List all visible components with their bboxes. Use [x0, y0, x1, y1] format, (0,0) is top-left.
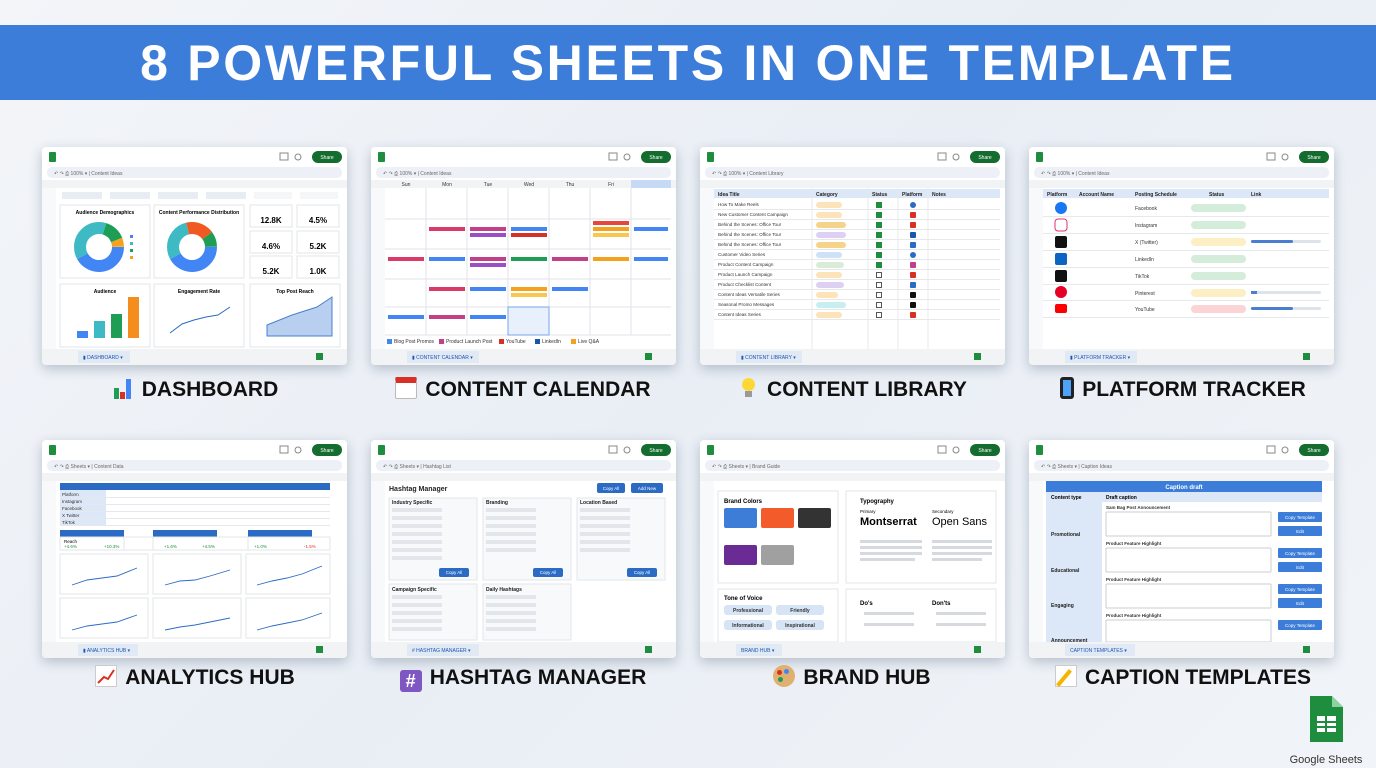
panel: content calendar: Product Launch Post: [446, 339, 493, 345]
title: 8 POWERFUL SHEETS IN ONE TEMPLATE: [140, 35, 1236, 91]
panel: caption templates: Product Feature Highlight: [1106, 577, 1162, 582]
panel: content calendar: ↶ ↷ ⎙ 100% ▾ | Content Ideas: [383, 171, 452, 177]
panel: content library: Platform: [902, 192, 923, 198]
panel: content library: Category: [816, 192, 838, 198]
panel: platform tracker: ↶ ↷ ⎙ 100% ▾ | Content Ideas: [1041, 171, 1110, 177]
panel: hashtag manager: Daily Hashtags: [486, 587, 522, 593]
panel: analytics hub: +4.6%: [64, 544, 77, 549]
panel: platform tracker: Status: [1209, 192, 1224, 198]
panel: content library: Product Launch Campaign: [718, 272, 773, 277]
panel: hashtag manager: Copy All: [446, 570, 462, 575]
label: content calendar: CONTENT CALENDAR: [425, 378, 651, 401]
panel: content library: ↶ ↷ ⎙ 100% ▾ | Content Library: [712, 171, 784, 177]
panel: analytics hub: Facebook: [62, 506, 83, 511]
panel: brand hub: Typography: [860, 499, 895, 505]
panel: brand hub: Do's: [860, 601, 873, 607]
panel: caption templates: Copy Template: [1285, 587, 1315, 592]
panel: platform tracker: Link: [1251, 192, 1261, 198]
panel: content calendar: LinkedIn: [542, 339, 561, 345]
panel: content calendar: [371, 147, 676, 365]
panel: caption templates: Edit: [1296, 529, 1305, 534]
panel: content library: Behind the Scenes: Office Tour: [718, 242, 782, 247]
panel: brand hub: Montserrat: [860, 516, 917, 528]
panel: analytics hub: +1.0%: [254, 544, 267, 549]
panel: brand hub: BRAND HUB ▾: [741, 648, 775, 654]
label: hashtag manager: #: [406, 671, 416, 691]
panel: dashboard: 12.8K: [260, 216, 282, 225]
panel: caption templates: ↶ ↷ ⎙ Sheets ▾ | Caption Ideas: [1041, 464, 1112, 470]
panel: content library: ▮ CONTENT LIBRARY ▾: [741, 355, 796, 361]
panel: caption templates: Content type: [1051, 495, 1082, 501]
label: brand hub: BRAND HUB: [803, 666, 931, 689]
panel: brand hub: Don'ts: [932, 601, 951, 607]
panel: caption templates: CAPTION TEMPLATES ▾: [1070, 648, 1127, 654]
panel: hashtag manager: Hashtag Manager: [389, 486, 448, 493]
panel: analytics hub: -1.5%: [304, 544, 316, 549]
panel: platform tracker: Instagram: [1135, 223, 1157, 229]
panel: caption templates: Draft caption: [1106, 495, 1137, 501]
panel: content calendar: Sun: [402, 182, 411, 188]
panel: caption templates: Copy Template: [1285, 515, 1315, 520]
panel: dashboard: ↶ ↷ ⎙ 100% ▾ | Content Ideas: [54, 171, 123, 177]
panel: dashboard: Share: [320, 155, 334, 161]
panel: hashtag manager: Copy All: [634, 570, 650, 575]
logo: google sheets: [1290, 696, 1362, 766]
panel: content library: Product Content Campaign: [718, 262, 774, 267]
panel: dashboard: ▮ DASHBOARD ▾: [83, 355, 123, 361]
panel: analytics hub: ↶ ↷ ⎙ Sheets ▾ | Content Data: [54, 464, 124, 470]
panel: brand hub: Tone of Voice: [724, 596, 763, 602]
panel: hashtag manager: Industry Specific: [392, 500, 433, 506]
panel: analytics hub: [42, 440, 347, 658]
panel: dashboard: 5.2K: [310, 242, 327, 251]
panel: hashtag manager: # HASHTAG MANAGER ▾: [412, 648, 471, 654]
panel: dashboard: Audience Demographics: [76, 210, 135, 216]
panel: content library: New Customer Content Campaign: [718, 212, 788, 217]
panel: platform tracker: Facebook: [1135, 206, 1157, 212]
logo: google sheets: Google Sheets: [1290, 754, 1362, 766]
label: content library: CONTENT LIBRARY: [767, 378, 967, 401]
panel: platform tracker: LinkedIn: [1135, 257, 1154, 263]
panel: dashboard: [42, 147, 347, 365]
panel: hashtag manager: Location Based: [580, 500, 617, 506]
label: dashboard: DASHBOARD: [142, 378, 278, 401]
panel: caption templates: Edit: [1296, 601, 1305, 606]
panel: dashboard: Top Post Reach: [276, 289, 314, 295]
panel: platform tracker: Platform: [1047, 192, 1068, 198]
panel: dashboard: Engagement Rate: [178, 289, 220, 295]
panel: dashboard: 1.0K: [310, 267, 327, 276]
panel: content calendar: Blog Post Promos: [394, 339, 435, 345]
panel: content library: Status: [872, 192, 888, 198]
panel: platform tracker: TikTok: [1135, 274, 1150, 280]
panel: platform tracker: Account Name: [1079, 192, 1114, 198]
panel: content calendar: Share: [649, 155, 663, 161]
panel: platform tracker: Posting Schedule: [1135, 192, 1177, 198]
panel: content library: [700, 147, 1005, 365]
panel: caption templates: Engaging: [1051, 603, 1074, 609]
label: caption templates: CAPTION TEMPLATES: [1085, 666, 1311, 689]
panel: content library: Product Checklist Content: [718, 282, 772, 287]
panel: caption templates: Edit: [1296, 565, 1305, 570]
panel: platform tracker: YouTube: [1135, 307, 1155, 313]
panel: content library: Behind the Scenes: Office Tour: [718, 222, 782, 227]
label: hashtag manager: HASHTAG MANAGER: [430, 666, 646, 689]
panel: brand hub: Secondary: [932, 509, 954, 514]
panel: platform tracker: ▮ PLATFORM TRACKER ▾: [1070, 355, 1131, 361]
panel: hashtag manager: Copy All: [540, 570, 556, 575]
panel: content calendar: Mon: [442, 182, 452, 188]
panel: brand hub: Informational: [732, 623, 764, 629]
panel: brand hub: Open Sans: [932, 516, 988, 528]
panel: dashboard: 4.6%: [262, 242, 280, 251]
panel: analytics hub: Reach: [64, 539, 78, 544]
panel: caption templates: Product Feature Highlight: [1106, 613, 1162, 618]
panel: caption templates: Caption draft: [1165, 485, 1203, 491]
panel: content calendar: Live Q&A: [578, 339, 600, 345]
panel: content library: Content Ideas Series: [718, 312, 762, 317]
title: [0, 25, 1376, 100]
panel: dashboard: Audience: [94, 289, 116, 295]
panel: content calendar: Tue: [484, 182, 492, 188]
panel: caption templates: Announcement: [1051, 638, 1088, 644]
panel: brand hub: [700, 440, 1005, 658]
panel: analytics hub: Platform: [62, 492, 79, 497]
panel: caption templates: Product Feature Highlight: [1106, 541, 1162, 546]
panel: content library: Idea Title: [718, 192, 740, 198]
panel: hashtag manager: Copy All: [603, 486, 619, 491]
panel: brand hub: Share: [978, 448, 992, 454]
panel: dashboard: Content Performance Distribution: [159, 210, 239, 216]
panel: brand hub: Friendly: [790, 608, 810, 614]
label: platform tracker: PLATFORM TRACKER: [1082, 378, 1306, 401]
panel: content library: Notes: [932, 192, 946, 198]
panel: caption templates: Share: [1307, 448, 1321, 454]
panel: caption templates: Copy Template: [1285, 623, 1315, 628]
panel: brand hub: Inspirational: [785, 623, 815, 629]
panel: analytics hub: +1.6%: [164, 544, 177, 549]
panel: analytics hub: +10.3%: [104, 544, 119, 549]
panel: caption templates: Sam Bag Post Announcement: [1106, 505, 1171, 510]
panel: hashtag manager: Campaign Specific: [392, 587, 437, 593]
panel: content library: Content Ideas Versatile Series: [718, 292, 780, 297]
panel: analytics hub: ▮ ANALYTICS HUB ▾: [83, 648, 131, 654]
panel: brand hub: Brand Colors: [724, 499, 763, 505]
panel: caption templates: [1029, 440, 1334, 658]
panel: analytics hub: TikTok: [62, 520, 76, 525]
panel: caption templates: Promotional: [1051, 532, 1081, 538]
panel: content library: How To Make Reels: [718, 202, 759, 207]
panel: brand hub: Primary: [860, 509, 876, 514]
panel: caption templates: Copy Template: [1285, 551, 1315, 556]
panel: content library: Behind the Scenes: Office Tour: [718, 232, 782, 237]
panel: analytics hub: +4.5%: [202, 544, 215, 549]
panel: hashtag manager: Add New: [638, 486, 657, 491]
panel: analytics hub: Share: [320, 448, 334, 454]
panel: content calendar: Thu: [566, 182, 575, 188]
panel: caption templates: Educational: [1051, 568, 1080, 574]
panel: brand hub: ↶ ↷ ⎙ Sheets ▾ | Brand Guide: [712, 464, 780, 470]
panel: content calendar: Sat: [647, 182, 655, 188]
panel: content calendar: ▮ CONTENT CALENDAR ▾: [412, 355, 473, 361]
panel: content calendar: Fri: [608, 182, 614, 188]
panel: platform tracker: Share: [1307, 155, 1321, 161]
panel: platform tracker: Pinterest: [1135, 291, 1155, 297]
panel: content library: Share: [978, 155, 992, 161]
panel: content library: Customer Video Series: [718, 252, 766, 257]
panel: analytics hub: X Twitter: [62, 513, 80, 518]
panel: dashboard: 5.2K: [263, 267, 280, 276]
label: analytics hub: ANALYTICS HUB: [125, 666, 295, 689]
panel: content calendar: Wed: [524, 182, 534, 188]
panel: hashtag manager: [371, 440, 676, 658]
panel: platform tracker: [1029, 147, 1334, 365]
panel: hashtag manager: ↶ ↷ ⎙ Sheets ▾ | Hashtag List: [383, 464, 451, 470]
panel: analytics hub: Instagram: [62, 499, 82, 504]
panel: hashtag manager: Branding: [486, 500, 508, 506]
panel: hashtag manager: Share: [649, 448, 663, 454]
panel: content library: Seasonal Promo Messages: [718, 302, 775, 307]
panel: content calendar: YouTube: [506, 339, 526, 345]
panel: platform tracker: X (Twitter): [1135, 240, 1158, 246]
panel: dashboard: 4.5%: [309, 216, 327, 225]
panel: brand hub: Professional: [733, 608, 764, 614]
